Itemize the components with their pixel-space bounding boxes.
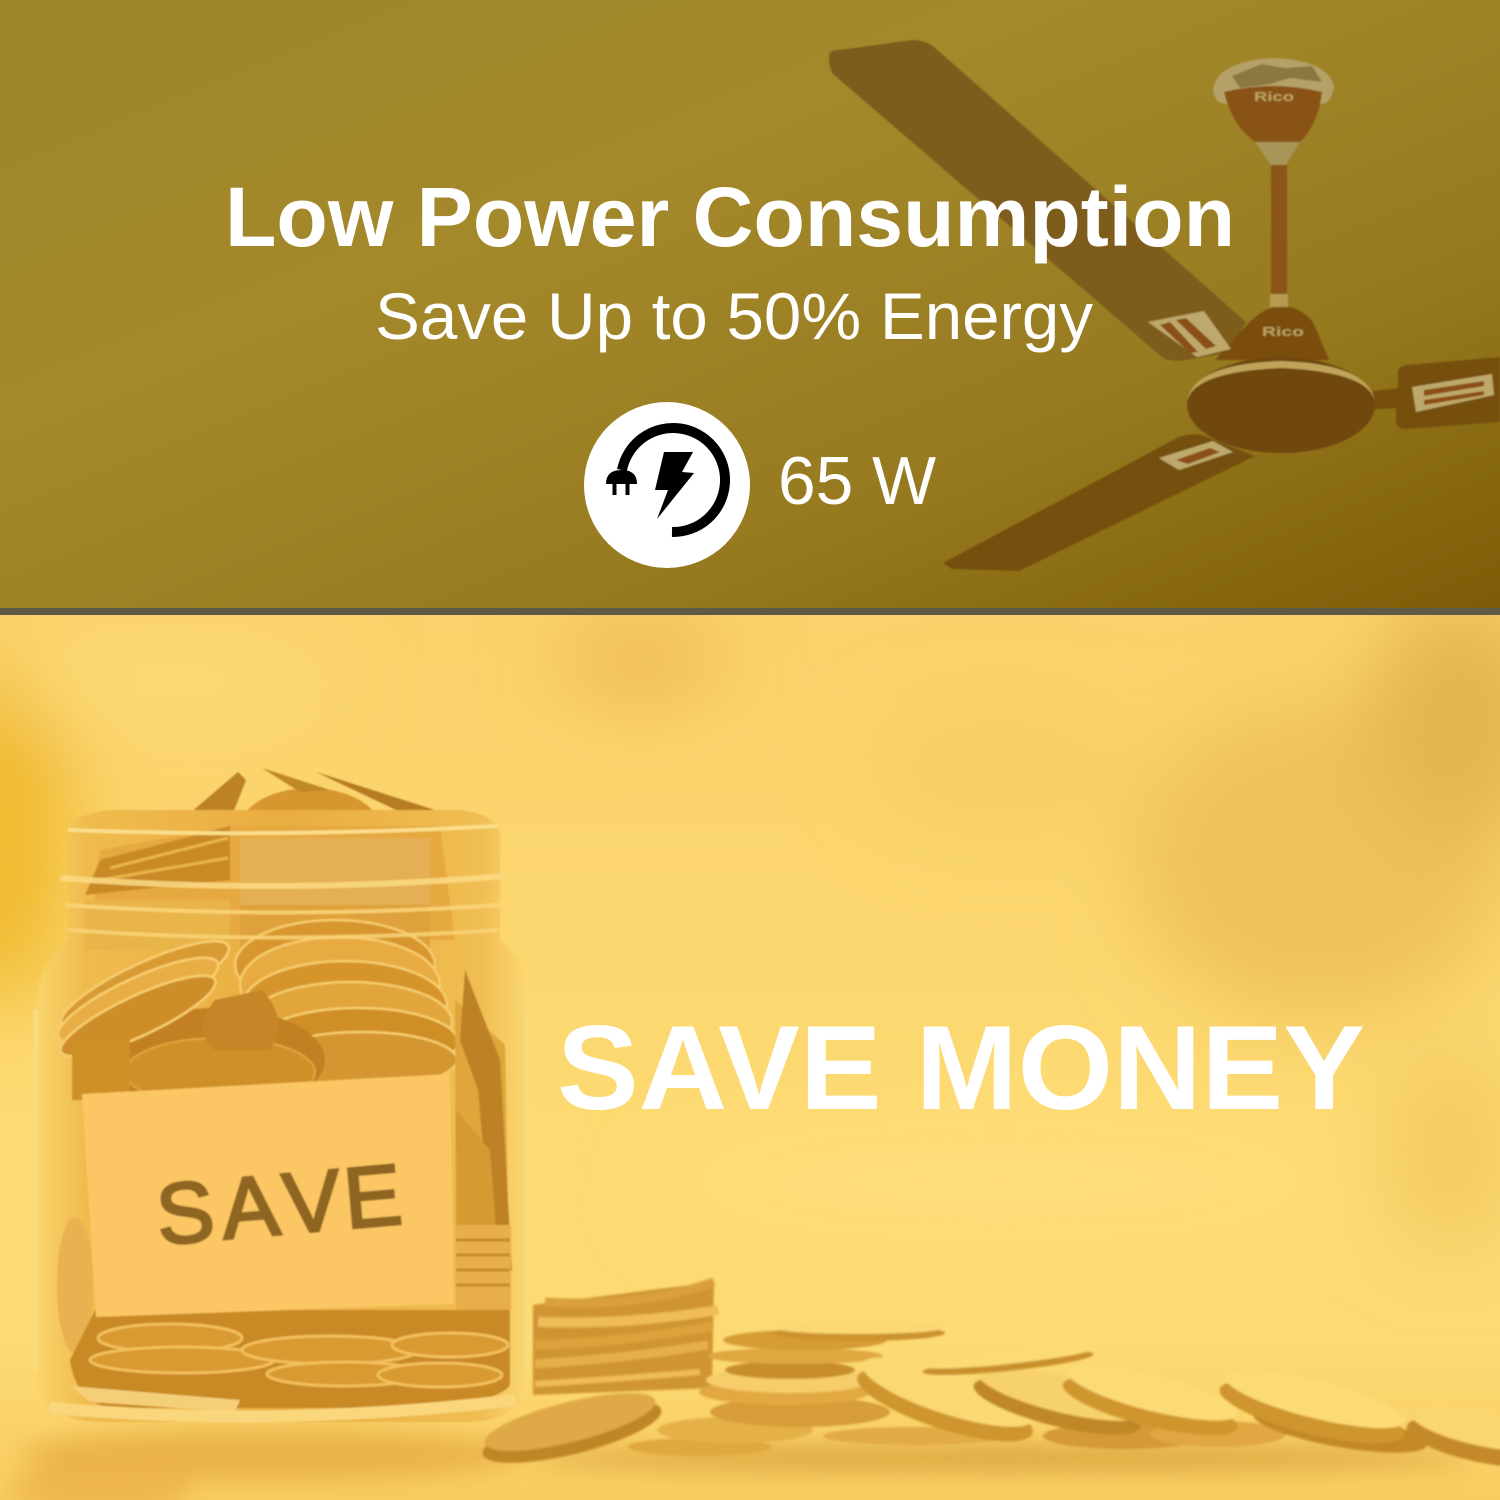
floor reflections <box>10 1429 1470 1500</box>
coins above the rim <box>194 768 434 811</box>
coins inside jar <box>49 826 512 1412</box>
blurred background tones <box>0 600 1500 1250</box>
leaning coins <box>482 1350 1500 1467</box>
panel: save money <box>0 600 1500 1500</box>
subheading: save up to 50% energy: Save Up to 50% Energy <box>375 279 1093 353</box>
coin stack near jar <box>533 1282 718 1395</box>
jar rim and thread highlights <box>36 826 527 1416</box>
heading: low power consumption: Low Power Consumption <box>225 170 1235 264</box>
divider between panels <box>0 608 1500 615</box>
ceiling fan illustration: Rico <box>1254 89 1294 104</box>
handwritten word on label: E <box>340 1147 405 1247</box>
ceiling fan illustration: Rico <box>1262 324 1304 339</box>
low coin piles <box>628 1322 1286 1456</box>
icon: power plug and bolt <box>584 402 750 568</box>
heading: save money: SAVE MONEY <box>557 1001 1365 1135</box>
coins on table <box>477 1282 1500 1477</box>
handwritten word on label: V <box>279 1152 345 1253</box>
glass jar of coins <box>36 768 529 1422</box>
wattage value: 65 W <box>778 443 936 519</box>
panel: low power consumption <box>0 0 1500 608</box>
jar body <box>36 810 529 1422</box>
ceiling fan illustration <box>829 40 1500 571</box>
jar label <box>82 1074 454 1317</box>
handwritten word on label: A <box>217 1157 283 1258</box>
handwritten word on label: S <box>153 1163 218 1264</box>
